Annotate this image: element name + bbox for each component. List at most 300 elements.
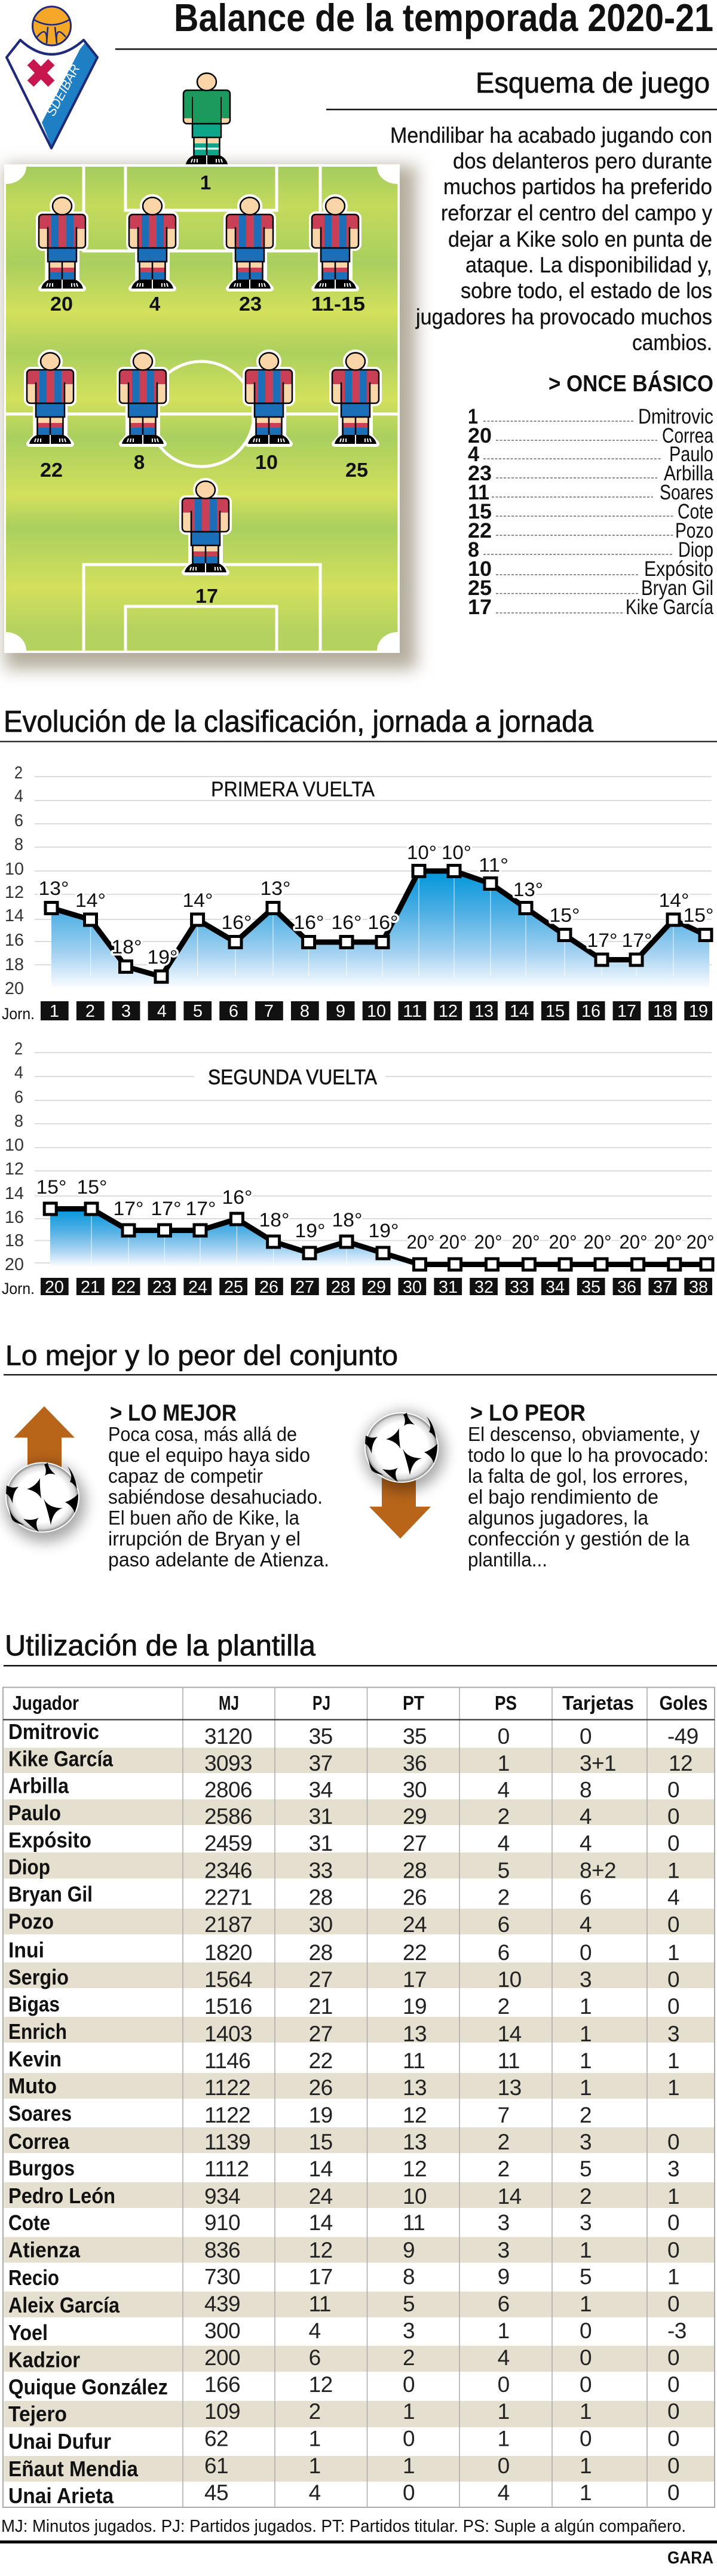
jornada labels: 18	[653, 1002, 672, 1021]
row: Exposito: 2459	[204, 1831, 252, 1856]
position labels: 13°	[513, 879, 543, 900]
player 8	[120, 352, 166, 473]
player 20: 20	[50, 293, 73, 315]
row: Pozo: Pozo	[8, 1909, 54, 1933]
row: Cote: Cote	[8, 2210, 50, 2235]
row: Unai Dufur: 62	[204, 2427, 228, 2451]
table header: PS	[495, 1692, 517, 1715]
row: Unai Arieta: 4	[498, 2480, 510, 2505]
row: Diop: 1	[667, 1858, 679, 1883]
jornada labels: 9	[336, 1002, 345, 1021]
table header	[13, 1692, 707, 1715]
row: Bryan Gil: 26	[403, 1885, 427, 1910]
text block: intro paragraph	[390, 123, 712, 355]
y axis	[5, 1039, 24, 1274]
list: once basico: 1	[468, 405, 478, 428]
row: Exposito: Expósito	[8, 1828, 91, 1852]
row: Yoel	[8, 2319, 687, 2345]
row: Quique Gonzalez: 0	[498, 2372, 510, 2397]
icon: down arrow	[369, 1473, 431, 1539]
row: Unai Arieta: 0	[667, 2480, 679, 2505]
row: Quique Gonzalez: 166	[204, 2372, 240, 2397]
position labels: 16°	[221, 912, 252, 933]
row: Pedro Leon: 14	[498, 2184, 522, 2209]
player 8: 8	[134, 451, 145, 473]
icon: ball	[4, 1462, 85, 1542]
jornada labels: 35	[581, 1278, 600, 1297]
position labels: 17°	[587, 930, 618, 951]
text block: lo peor: el bajo rendimiento de	[468, 1486, 658, 1508]
position labels: 15°	[36, 1176, 67, 1198]
jornada labels: 21	[81, 1278, 100, 1297]
row: Kike Garcia: 3+1	[580, 1751, 616, 1775]
row: Bryan Gil: 4	[667, 1885, 679, 1910]
position labels: 15°	[76, 1176, 108, 1198]
row: Enaut Mendia: 1	[580, 2454, 592, 2478]
list: once basico: 11	[468, 481, 489, 504]
heading: evolucion: Evolución de la clasificación, jornada a jornada	[4, 704, 594, 738]
text block: lo peor	[468, 1423, 709, 1571]
chart: primera vuelta	[2, 763, 713, 1023]
row: Paulo: Paulo	[8, 1801, 61, 1825]
row: Arbilla: 8	[580, 1778, 592, 1802]
row: Recio: 730	[204, 2264, 240, 2289]
player 11-15: 11-15	[311, 293, 365, 315]
jornada labels: 12	[439, 1002, 458, 1021]
y axis: 4	[14, 1063, 23, 1082]
row: Paulo: 29	[403, 1804, 427, 1829]
row: Exposito	[8, 1828, 679, 1856]
y axis: 16	[5, 931, 24, 950]
player 22: 22	[40, 459, 63, 481]
row: Pedro Leon: 1	[667, 2184, 679, 2209]
position labels: 13°	[261, 878, 290, 899]
row: Pozo	[8, 1909, 679, 1937]
row: Arbilla: 30	[403, 1778, 427, 1802]
position labels: 13°	[38, 878, 69, 899]
row: Quique Gonzalez: 12	[309, 2372, 333, 2397]
row: Kike Garcia: 37	[309, 1751, 333, 1775]
position labels: 17°	[114, 1198, 143, 1219]
row: Pozo: 4	[580, 1912, 592, 1937]
row: Unai Dufur: 0	[403, 2427, 415, 2451]
position labels	[36, 1176, 715, 1253]
player 22	[27, 352, 73, 481]
text block: lo mejor: que el equipo haya sido	[108, 1444, 310, 1466]
position labels: 16°	[368, 912, 398, 933]
row: Kadzior: 0	[667, 2345, 679, 2370]
row: Cote: 3	[498, 2210, 510, 2235]
jornada labels: 7	[264, 1002, 274, 1021]
jornada labels: 30	[403, 1278, 422, 1297]
row: Unai Dufur: Unai Dufur	[8, 2429, 111, 2454]
y axis: 18	[5, 1231, 24, 1250]
position labels: 16°	[331, 912, 362, 933]
position labels: 20°	[439, 1231, 467, 1253]
row: Enrich: 13	[403, 2022, 427, 2046]
position labels: 15°	[550, 904, 580, 926]
row: Enaut Mendia: Eñaut Mendia	[8, 2457, 139, 2481]
row: Bigas: Bigas	[8, 1992, 60, 2016]
row: Exposito: 4	[580, 1831, 592, 1856]
row: Dmitrovic: 35	[403, 1724, 427, 1749]
jornada labels: 26	[259, 1278, 278, 1297]
player 17: 17	[195, 585, 218, 607]
table header: MJ	[219, 1692, 239, 1715]
jornada labels: 33	[510, 1278, 529, 1297]
player 11-15	[311, 197, 365, 315]
row: Pozo: 30	[309, 1912, 333, 1937]
row: Pedro Leon	[8, 2184, 679, 2209]
row: Arbilla: 4	[498, 1778, 510, 1802]
position labels: 17°	[151, 1198, 182, 1219]
row: Diop: 2346	[204, 1858, 252, 1883]
markers	[45, 865, 712, 982]
jornada labels: Jorn.	[2, 1280, 35, 1298]
row: Yoel: 4	[309, 2319, 321, 2343]
jornada labels: 28	[331, 1278, 350, 1297]
jornada labels: 2	[85, 1002, 95, 1021]
row: Paulo: 2	[498, 1804, 510, 1829]
row: Arbilla: Arbilla	[8, 1774, 69, 1798]
row: Muto: 26	[309, 2075, 333, 2100]
row: Yoel: 3	[403, 2319, 415, 2343]
row: Dmitrovic: 35	[309, 1724, 333, 1749]
row: Pozo: 0	[667, 1912, 679, 1937]
row: Soares: 19	[309, 2103, 333, 2127]
text block: lo mejor: irrupción de Bryan y el	[108, 1528, 301, 1550]
jornada labels: 20	[45, 1278, 64, 1297]
row: Unai Dufur: 1	[309, 2427, 321, 2451]
text block: lo mejor: El buen año de Kike, la	[108, 1507, 300, 1529]
position labels	[38, 842, 713, 968]
row: Enaut Mendia	[8, 2454, 679, 2481]
jornada labels: 3	[121, 1002, 131, 1021]
table header: Goles	[660, 1692, 707, 1715]
icon: ball	[363, 1412, 445, 1491]
row: Aleix Garcia: Aleix García	[8, 2293, 120, 2317]
markers	[44, 1203, 713, 1270]
player 20	[39, 197, 85, 315]
row: Diop: 28	[403, 1858, 427, 1883]
jornada labels: 29	[367, 1278, 386, 1297]
row: Diop: 8+2	[580, 1858, 616, 1883]
text block: lo peor: confección y gestión de la	[468, 1528, 690, 1550]
row: Recio: 5	[580, 2264, 592, 2289]
jornada labels: 38	[689, 1278, 708, 1297]
row: Aleix Garcia: 5	[403, 2292, 415, 2316]
position labels: 17°	[621, 930, 652, 951]
y axis: 2	[14, 1039, 23, 1059]
row: Tejero: 1	[498, 2399, 510, 2424]
row: Inui: 6	[498, 1940, 510, 1965]
row: Inui: 1	[667, 1940, 679, 1965]
player 25: 25	[345, 459, 368, 481]
row: Enaut Mendia: 0	[667, 2454, 679, 2478]
jornada labels: Jorn.	[2, 1005, 35, 1023]
row: Dmitrovic: 0	[498, 1724, 510, 1749]
jornada labels	[2, 1278, 712, 1298]
row: Enrich: 3	[667, 2022, 679, 2046]
row: Unai Dufur	[8, 2427, 679, 2454]
y axis: 14	[5, 906, 24, 925]
row: Unai Arieta	[8, 2480, 679, 2508]
heading: utilizacion: Utilización de la plantilla	[5, 1630, 316, 1662]
row: Kadzior: 2	[403, 2345, 415, 2370]
row: Atienza: 12	[309, 2238, 333, 2262]
row: Pedro Leon: 934	[204, 2184, 240, 2209]
table: plantilla	[3, 1687, 715, 2508]
row: Soares: 1122	[204, 2103, 250, 2127]
row: Quique Gonzalez	[8, 2372, 679, 2399]
row: Muto	[8, 2074, 679, 2100]
row: Kevin	[8, 2047, 679, 2073]
player 4	[129, 197, 176, 315]
row: Diop	[8, 1855, 679, 1883]
row: Kike Garcia: 1	[498, 1751, 510, 1775]
list: once basico: 23	[468, 462, 492, 485]
row: Atienza	[8, 2238, 679, 2262]
row: Enrich: 27	[309, 2022, 333, 2046]
row: Aleix Garcia: 6	[498, 2292, 510, 2316]
panel: header	[7, 0, 713, 148]
jornada labels: 16	[581, 1002, 600, 1021]
line	[51, 871, 706, 977]
row: Enrich: 14	[498, 2022, 522, 2046]
row: Tejero: 2	[309, 2399, 321, 2424]
row: Bryan Gil: 2271	[204, 1885, 252, 1910]
row: Bryan Gil: Bryan Gil	[8, 1882, 93, 1906]
text block: lo peor: la falta de gol, los errores,	[468, 1465, 688, 1487]
list: once basico: 4	[468, 443, 480, 466]
row: Bryan Gil: 28	[309, 1885, 333, 1910]
row: Arbilla	[8, 1774, 679, 1802]
position labels: 17°	[185, 1198, 216, 1219]
text block: lo peor: plantilla...	[468, 1548, 547, 1571]
row: Kadzior	[8, 2345, 679, 2372]
heading: Esquema de juego: Esquema de juego	[476, 68, 710, 99]
chart: segunda vuelta	[2, 1039, 715, 1298]
row: Correa	[8, 2129, 679, 2154]
panel: lo peor	[363, 1400, 709, 1571]
row: Muto: 1	[667, 2075, 679, 2100]
row: Recio: 17	[309, 2264, 333, 2289]
row: Paulo	[8, 1801, 679, 1829]
row: Paulo: 2586	[204, 1804, 252, 1829]
text block: lo mejor: capaz de competir	[108, 1465, 263, 1487]
jornada labels: 6	[229, 1002, 238, 1021]
player 23	[226, 197, 273, 315]
row: Kevin: 11	[403, 2048, 425, 2073]
row: Enrich	[8, 2019, 679, 2046]
position labels: 19°	[368, 1220, 399, 1241]
row: Correa: 15	[309, 2130, 333, 2154]
row: Sergio: 1564	[204, 1967, 252, 1992]
row: Dmitrovic: Dmitrovic	[8, 1719, 99, 1744]
jornada labels: 27	[295, 1278, 314, 1297]
jornada labels: 32	[474, 1278, 494, 1297]
jornada labels: 17	[617, 1002, 636, 1021]
row: Correa: 3	[580, 2130, 592, 2154]
y axis: 14	[5, 1184, 24, 1203]
row: Sergio: Sergio	[8, 1965, 69, 1989]
row: Burgos: 1112	[204, 2157, 249, 2181]
jornada labels: 34	[546, 1278, 565, 1297]
row: Bigas: 1	[580, 1994, 592, 2019]
position labels: 11°	[479, 854, 508, 876]
jornada labels: 15	[546, 1002, 565, 1021]
row: Inui: Inui	[8, 1937, 44, 1962]
row: Enaut Mendia: 61	[204, 2454, 228, 2478]
row: Yoel: -3	[667, 2319, 687, 2343]
row: Unai Dufur: 0	[580, 2427, 592, 2451]
row: Correa: 1139	[204, 2130, 250, 2154]
row: Kike Garcia: 3093	[204, 1751, 252, 1775]
jornada labels: 13	[474, 1002, 494, 1021]
row: Soares	[8, 2101, 592, 2127]
jornada labels	[2, 1001, 712, 1023]
row: Kevin: 1	[580, 2048, 592, 2073]
row: Recio: 1	[667, 2264, 679, 2289]
player 10: 10	[255, 451, 278, 473]
row: Tejero: 109	[204, 2399, 240, 2424]
list: once basico: 20	[468, 424, 492, 447]
y axis: 12	[5, 1160, 24, 1179]
row: Atienza: 0	[667, 2238, 679, 2262]
row: Pozo: 6	[498, 1912, 510, 1937]
row: Sergio: 10	[498, 1967, 522, 1992]
player: goalkeeper: 1	[200, 171, 211, 194]
row: Enaut Mendia: 0	[498, 2454, 510, 2478]
row: Burgos: 5	[580, 2157, 592, 2181]
row: Paulo: 31	[309, 1804, 333, 1829]
row: Burgos: Burgos	[8, 2155, 75, 2181]
row: Burgos	[8, 2155, 679, 2181]
row: Inui: 28	[309, 1940, 333, 1965]
row: Sergio	[8, 1965, 679, 1992]
jornada labels: 5	[193, 1002, 203, 1021]
y axis: 10	[5, 1136, 24, 1155]
position labels: 18°	[259, 1209, 289, 1231]
row: Cote: 14	[309, 2210, 333, 2235]
player 25	[332, 352, 379, 481]
row: Tejero: 0	[667, 2399, 679, 2424]
row: Atienza: 9	[403, 2238, 415, 2262]
y axis: 8	[14, 1112, 23, 1131]
row: Bigas: 0	[667, 1994, 679, 2019]
list: once basico: 10	[468, 557, 492, 581]
row: Arbilla: 2806	[204, 1778, 252, 1802]
row: Kike Garcia: 12	[669, 1751, 693, 1775]
row: Aleix Garcia: 1	[580, 2292, 592, 2316]
row: Recio: 9	[498, 2264, 510, 2289]
position labels: 20°	[549, 1231, 577, 1253]
row: Cote: 3	[580, 2210, 592, 2235]
position labels: 20°	[654, 1231, 682, 1253]
player 4: 4	[149, 293, 161, 315]
y axis	[5, 763, 24, 998]
row: Kadzior: 4	[498, 2345, 510, 2370]
row: Bigas	[8, 1992, 679, 2019]
text block: lo mejor	[108, 1423, 329, 1571]
jornada labels: 22	[117, 1278, 136, 1297]
list: once basico: 25	[468, 576, 492, 600]
row: Atienza: 3	[498, 2238, 510, 2262]
row: Aleix Garcia: 0	[667, 2292, 679, 2316]
row: Arbilla: 34	[309, 1778, 333, 1802]
position labels: 19°	[147, 946, 178, 968]
position labels: 16°	[222, 1186, 252, 1208]
row: Bigas: 1516	[204, 1994, 252, 2019]
position labels: 10°	[442, 842, 471, 863]
row: Pedro Leon: 24	[309, 2184, 333, 2209]
row: Sergio: 0	[667, 1967, 679, 1992]
row: Yoel: 1	[498, 2319, 510, 2343]
text block: lo mejor: Poca cosa, más allá de	[108, 1423, 297, 1445]
row: Kadzior: Kadzior	[8, 2348, 80, 2372]
row: Tejero	[8, 2399, 679, 2426]
row: Burgos: 3	[667, 2157, 679, 2181]
row: Arbilla: 0	[667, 1778, 679, 1802]
y axis: 2	[14, 763, 23, 783]
row: Bigas: 21	[309, 1994, 333, 2019]
row: Recio	[8, 2264, 679, 2290]
row: Unai Arieta: 1	[580, 2480, 592, 2505]
row: Diop: 33	[309, 1858, 333, 1883]
row: Inui	[8, 1937, 679, 1965]
row: Kadzior: 0	[580, 2345, 592, 2370]
row: Inui: 1820	[204, 1940, 252, 1965]
position labels: 14°	[658, 890, 690, 911]
y axis: 20	[5, 1255, 24, 1274]
row: Pedro Leon: Pedro León	[8, 2184, 115, 2208]
row: Exposito: 31	[309, 1831, 333, 1856]
panel: lo mejor	[4, 1400, 329, 1571]
row: Muto: 13	[498, 2075, 522, 2100]
jornada labels: 1	[50, 1002, 59, 1021]
row: Paulo: 0	[667, 1804, 679, 1829]
row: Cote	[8, 2210, 679, 2235]
row: Dmitrovic: -49	[667, 1724, 698, 1749]
row: Dmitrovic: 0	[580, 1724, 592, 1749]
row: Exposito: 0	[667, 1831, 679, 1856]
jornada labels: 4	[157, 1002, 167, 1021]
row: Sergio: 3	[580, 1967, 592, 1992]
jornada labels: 24	[188, 1278, 207, 1297]
player: goalkeeper	[183, 73, 230, 194]
row: Tejero: 1	[580, 2399, 592, 2424]
jornada labels: 19	[689, 1002, 708, 1021]
row: Exposito: 27	[403, 1831, 427, 1856]
row: Quique Gonzalez: 0	[580, 2372, 592, 2397]
row: Recio: Recio	[8, 2265, 59, 2290]
row: Quique Gonzalez: Quique González	[8, 2375, 168, 2399]
row: Bryan Gil: 6	[580, 1885, 592, 1910]
row: Unai Dufur: 1	[498, 2427, 510, 2451]
row: Paulo: 4	[580, 1804, 592, 1829]
row: Unai Arieta: 45	[204, 2480, 228, 2505]
position labels: 14°	[183, 890, 213, 911]
row: Exposito: 4	[498, 1831, 510, 1856]
heading: lo peor: > LO PEOR	[470, 1400, 586, 1426]
row: Cote: 910	[204, 2210, 240, 2235]
row: Pedro Leon: 10	[403, 2184, 427, 2209]
row: Pozo: 2187	[204, 1912, 252, 1937]
player 10	[246, 352, 292, 473]
position labels: 20°	[619, 1231, 648, 1253]
row: Bigas: 2	[498, 1994, 510, 2019]
panel: pitch	[4, 164, 416, 669]
